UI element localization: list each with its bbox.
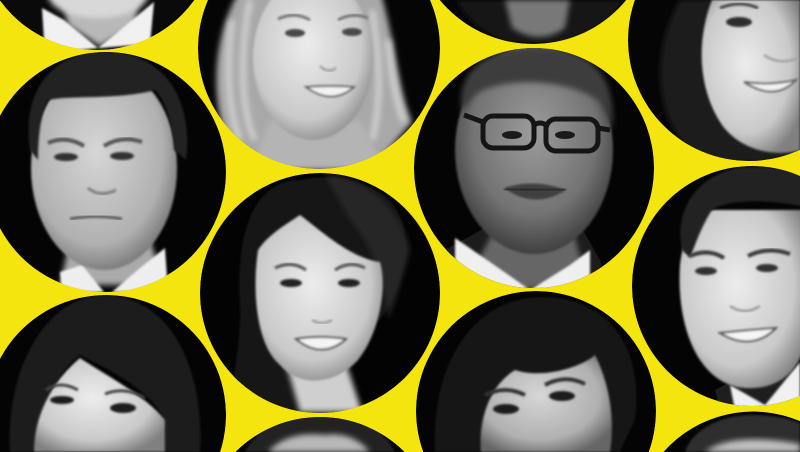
portrait: man top left: [0, 0, 194, 50]
portrait: smiling man right: [632, 166, 800, 410]
portrait: man with glasses: [414, 46, 654, 290]
portrait: man middle left: [0, 52, 226, 292]
portrait: smiling woman top right: [628, 0, 800, 162]
portrait: woman centre: [200, 173, 440, 413]
portrait: blonde woman top centre: [198, 0, 440, 170]
portrait: woman bottom left: [0, 295, 226, 452]
portrait: person bottom right: [663, 411, 800, 452]
portrait: woman bottom centre right: [416, 291, 656, 452]
portrait: person bottom centre: [235, 416, 405, 452]
portrait: dark-haired woman top: [440, 0, 626, 44]
